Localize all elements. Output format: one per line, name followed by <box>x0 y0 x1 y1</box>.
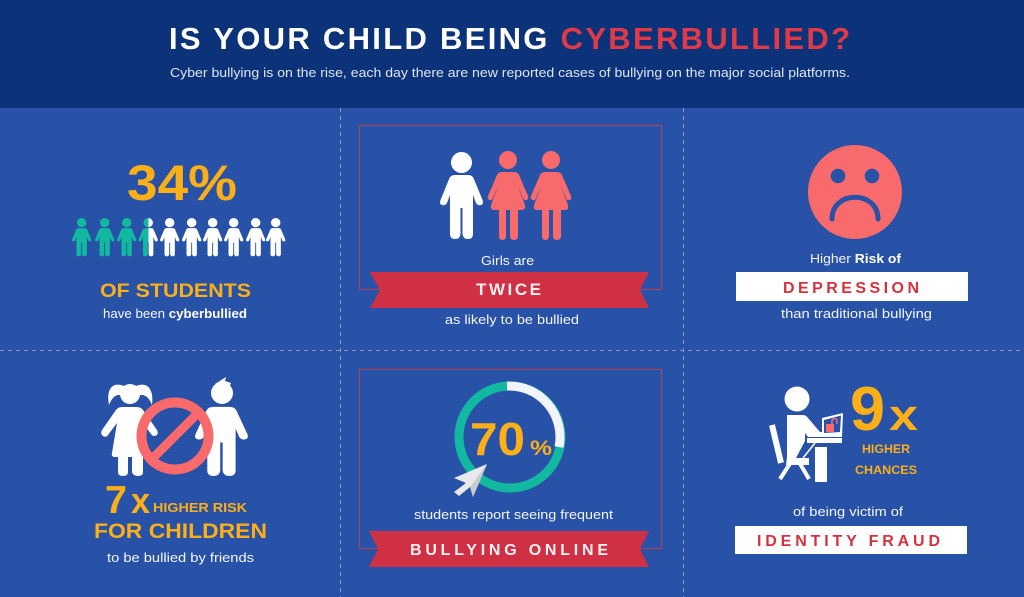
panel frame <box>360 370 662 548</box>
panel: higher risk of depression <box>736 145 968 321</box>
ribbon: twice <box>370 272 649 308</box>
chart: 70 percent ring: % <box>530 437 552 460</box>
caption: to be bullied by friends: to be bullied by friends <box>107 550 255 565</box>
white box: identity fraud: IDENTITY FRAUD <box>757 533 940 550</box>
stat: 9x: 9 <box>850 375 885 444</box>
caption: of being victim of: of being victim of <box>793 504 903 519</box>
title: IS YOUR CHILD BEING CYBERBULLIED? <box>169 21 850 56</box>
icon row: ten students <box>72 218 285 256</box>
chart: 70 percent ring: 70 <box>470 413 525 465</box>
stat: 7x: 7 <box>105 479 127 522</box>
caption: girls are: Girls are <box>481 253 534 268</box>
icon: girl with pigtails <box>101 384 158 476</box>
panel frame <box>360 126 662 290</box>
caption: students report seeing frequent: students report seeing frequent <box>414 507 613 522</box>
panel: seven times higher risk for children <box>94 377 267 565</box>
icon: person at laptop <box>772 386 843 482</box>
heading: higher: HIGHER <box>862 442 910 456</box>
ribbon: bullying online: BULLYING ONLINE <box>410 542 608 559</box>
icon: cursor arrow <box>454 464 487 497</box>
heading: for children: FOR CHILDREN <box>94 520 267 543</box>
panel: girls twice as likely <box>360 126 662 327</box>
stat: 7x: x <box>131 480 150 521</box>
caption: have been cyberbullied: have been cyberbullied <box>103 306 247 321</box>
ribbon: twice: TWICE <box>476 280 541 299</box>
stat: 7x <box>105 479 150 522</box>
chart: 70 percent ring <box>459 386 561 488</box>
white box: identity fraud <box>735 526 967 554</box>
icon: prohibition sign <box>142 402 208 470</box>
header band <box>0 0 1024 108</box>
white box: depression <box>736 272 968 301</box>
stat: 9x: x <box>889 391 919 440</box>
icon: girl two <box>531 151 571 240</box>
caption: than traditional bullying: than traditional bullying <box>781 306 932 321</box>
stat: 9x <box>850 375 919 444</box>
icon: boy <box>440 152 483 239</box>
heading: higher risk: HIGHER RISK <box>153 500 248 515</box>
icon: boy with tuft <box>195 377 248 476</box>
icon: sad face <box>808 145 902 239</box>
panel: nine times identity fraud <box>735 375 967 554</box>
caption: higher risk of: Higher Risk of <box>810 251 902 266</box>
heading: of students: OF STUDENTS <box>100 281 251 302</box>
ribbon: bullying online <box>369 531 649 567</box>
heading: chances: CHANCES <box>855 463 917 477</box>
panel: 34 percent of students <box>72 155 285 321</box>
subtitle: Cyber bullying is on the rise, each day there are new reported cases of bullying on the major social platforms. <box>170 65 850 80</box>
panel: seventy percent bullying online <box>360 370 662 567</box>
icon: girl one <box>488 151 528 240</box>
caption: as likely to be bullied: as likely to be bullied <box>445 312 579 327</box>
white box: depression: DEPRESSION <box>783 280 919 297</box>
stat: 34%: 34% <box>127 155 237 211</box>
